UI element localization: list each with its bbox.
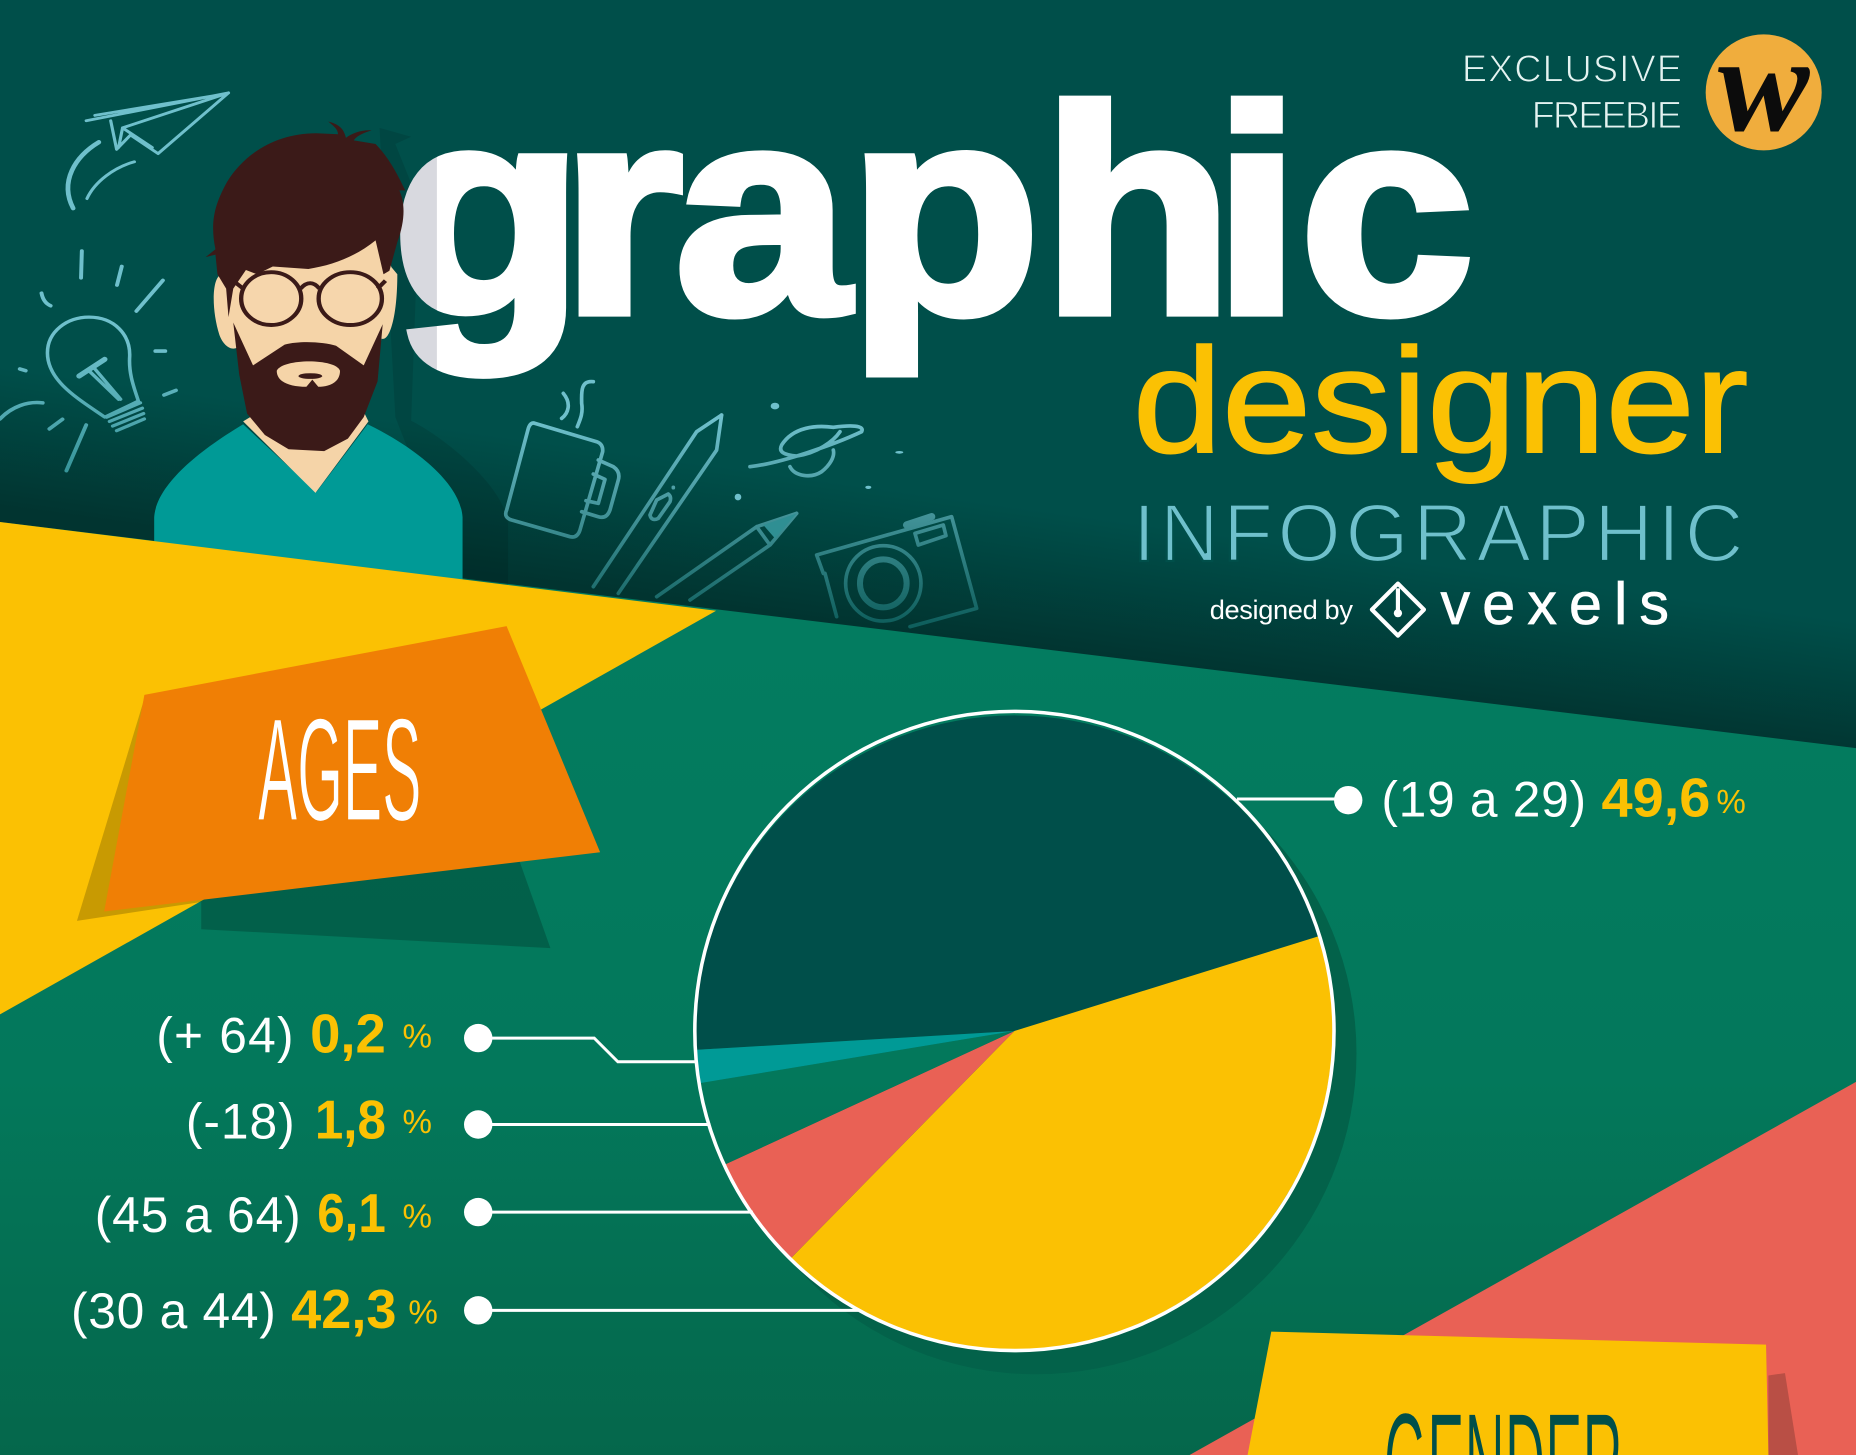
decorative dots	[735, 403, 903, 500]
slice: 30 a 44	[790, 936, 1333, 1350]
label: over 64: (+ 64)	[156, 1007, 294, 1063]
yellow corner shape	[0, 522, 716, 1014]
label: 45 a 64	[95, 1183, 432, 1244]
slice: 19 a 29	[695, 715, 1319, 1050]
panel: gender tag	[1248, 1332, 1798, 1455]
label: over 64	[156, 1003, 432, 1064]
leader lines	[478, 799, 1348, 1310]
exclusive freebie label: EXCLUSIVE	[1462, 49, 1682, 91]
pie chart: ages	[695, 711, 1356, 1374]
glasses	[234, 272, 385, 325]
pie shadow	[715, 733, 1356, 1374]
beard	[233, 323, 383, 451]
slice: over 64	[695, 1031, 1014, 1083]
slice: 45 a 64	[724, 1031, 1014, 1259]
icon: vexels logo	[1372, 584, 1424, 636]
label: under 18: (-18)	[186, 1094, 295, 1150]
label: 30 a 44: %	[408, 1294, 438, 1331]
icon: pencil	[657, 513, 797, 600]
shirt	[154, 424, 463, 589]
exclusive freebie label: FREEBIE	[1532, 95, 1682, 137]
label: over 64: 0,2	[310, 1003, 386, 1064]
label: 45 a 64: (45 a 64)	[95, 1187, 301, 1243]
label: 30 a 44	[71, 1279, 438, 1340]
tag shape	[1248, 1332, 1768, 1455]
subtitle: designer: designer	[1133, 317, 1748, 484]
icon: freebie badge: w	[1718, 8, 1811, 160]
panel: ages tag	[77, 626, 600, 948]
tag shadow	[1768, 1373, 1798, 1455]
icon: planet	[750, 426, 862, 476]
character: bearded designer	[154, 121, 463, 589]
mouth	[298, 373, 322, 379]
designed by credit: designed by	[1210, 594, 1353, 625]
coral background shape	[1190, 1082, 1856, 1455]
character shadow	[380, 128, 508, 589]
slice: under 18	[699, 1031, 1014, 1165]
label: over 64: %	[402, 1019, 432, 1056]
label: 19 a 29: %	[1716, 784, 1746, 821]
lower green background	[0, 522, 1856, 1455]
label: 30 a 44: (30 a 44)	[71, 1283, 276, 1339]
neck and face	[214, 231, 397, 493]
label: 45 a 64: %	[402, 1198, 432, 1235]
label: under 18: %	[402, 1104, 432, 1141]
hair	[206, 121, 405, 317]
label: 30 a 44: 42,3	[291, 1279, 397, 1340]
icon: light bulb	[0, 251, 176, 471]
header background	[0, 0, 1856, 781]
pie outline	[695, 711, 1334, 1351]
label: 45 a 64: 6,1	[317, 1183, 386, 1244]
doodles: desk objects	[506, 382, 977, 627]
icon: camera	[817, 517, 977, 627]
doodles: plane and bulb	[0, 93, 229, 471]
icon: coffee mug	[506, 382, 619, 537]
panel: ages tag: AGES	[258, 688, 421, 852]
leader dots	[464, 786, 1362, 1325]
label: 19 a 29: (19 a 29)	[1381, 772, 1586, 828]
icon: paper plane	[68, 93, 229, 208]
label: 19 a 29	[1381, 768, 1746, 829]
exclusive freebie label	[1462, 49, 1682, 137]
subtitle: infographic: INFOGRAPHIC	[1133, 488, 1744, 579]
label: 19 a 29: 49,6	[1602, 768, 1710, 829]
chin patch	[277, 361, 340, 387]
tag shadow	[77, 698, 550, 948]
label: under 18	[186, 1090, 432, 1151]
vexels wordmark: vexels	[1441, 570, 1669, 637]
icon: stylus pen	[593, 415, 722, 593]
label: under 18: 1,8	[315, 1090, 386, 1151]
title: graphic: graphic	[392, 48, 1474, 377]
tag shape	[104, 626, 600, 911]
